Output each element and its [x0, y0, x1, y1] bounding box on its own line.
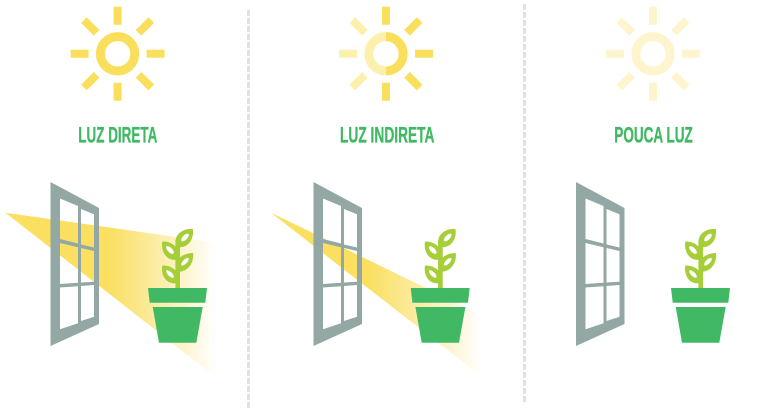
icon: full sun — [71, 7, 165, 101]
stem — [438, 240, 443, 289]
pot rim — [411, 288, 470, 303]
light beam: direct — [6, 213, 216, 376]
heading: luz indireta: LUZ INDIRETA — [340, 122, 434, 148]
leaf veins — [428, 232, 453, 279]
icon: plant — [148, 229, 207, 343]
icon: plant — [671, 229, 730, 343]
panel: luz indireta — [271, 7, 482, 376]
heading: pouca luz: POUCA LUZ — [614, 122, 693, 148]
pot rim — [671, 288, 730, 303]
heading: luz direta: LUZ DIRETA — [78, 122, 157, 148]
pot body — [415, 307, 465, 343]
leaves — [162, 229, 193, 283]
stem — [175, 240, 180, 289]
leaf veins — [165, 232, 190, 279]
leaves — [685, 229, 716, 283]
pot body — [153, 307, 203, 343]
panel: luz direta — [6, 7, 216, 376]
pot body — [676, 307, 726, 343]
icon: window — [50, 182, 99, 346]
icon: pale sun — [606, 7, 700, 101]
panel: pouca luz — [576, 7, 730, 346]
leaf veins — [688, 232, 713, 279]
stem — [698, 240, 703, 289]
icon: window — [576, 182, 624, 346]
light beam: indirect — [271, 213, 482, 376]
icon: half sun — [339, 7, 433, 101]
icon: window — [314, 182, 362, 346]
leaves — [425, 229, 456, 283]
icon: plant — [411, 229, 470, 343]
pot rim — [148, 288, 207, 303]
